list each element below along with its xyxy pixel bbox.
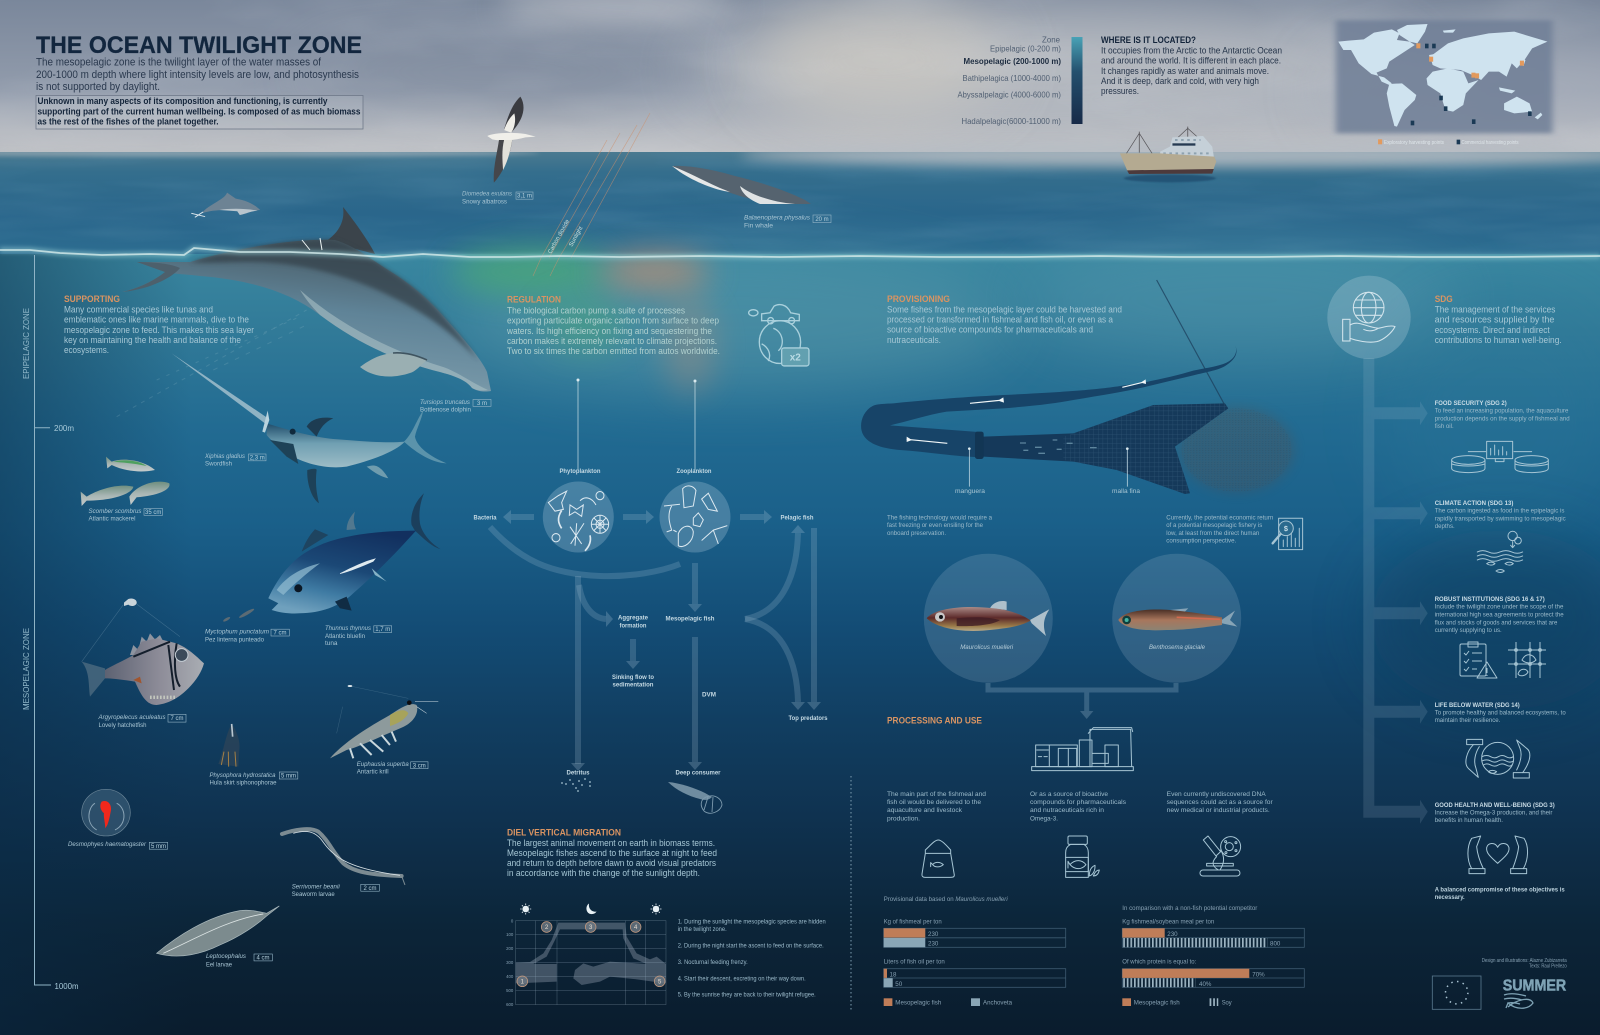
ocean zones scale: Zone [1042, 34, 1060, 44]
panel: supporting [64, 294, 254, 355]
diagram: carbon pump food web: DVM [702, 692, 716, 698]
phytoplankton circle [543, 482, 614, 552]
migration step notes: 5. By the sunrise they are back to their twilight refugee. [678, 992, 816, 999]
light rays with labels: carbon dioxide and sunlight [533, 113, 650, 276]
note: economic return: of a potential mesopelagic fishery is [1166, 522, 1262, 529]
chart: diel migration depth: 400 [506, 974, 514, 979]
chart: fishmeal and protein, mesopelagic vs soy: 230 [1167, 931, 1178, 938]
sdg: food security: production depends on the supply of fishmeal and [1435, 415, 1570, 422]
map legend: Exploratory harvesting points [1384, 140, 1444, 146]
icon: carbon into sea and fishes [1477, 531, 1523, 572]
label: snowy albatross: 3,1 m [517, 194, 532, 200]
label: atlantic mackerel: Atlantic mackerel [88, 516, 136, 523]
world map with harvesting points [1336, 20, 1553, 144]
label: myctophum: Myctophum punctatum [205, 629, 270, 636]
chart: fishmeal and protein, mesopelagic vs soy: Kg fishmeal/soybean meal per ton [1122, 918, 1215, 925]
icon: atlantic bluefin tuna [268, 493, 441, 613]
migration step notes: 2. During the night start the ascent to feed on the surface. [678, 943, 824, 950]
where is it located text: pressures. [1101, 85, 1139, 96]
sdg: climate action: The carbon ingested as food in the epipelagic is [1435, 508, 1564, 515]
panel: provisioning: nutraceuticals. [887, 335, 941, 345]
sdg: climate action: depths. [1435, 523, 1455, 530]
label: atlantic mackerel: Scomber scombrus [88, 508, 142, 515]
sdg: robust institutions [1435, 596, 1564, 634]
credits: Texts: Raul Prellezo [1529, 963, 1567, 969]
chart: fishmeal and fish oil, mesopelagic vs anchoveta: 230 [928, 931, 939, 938]
label: fin whale [744, 214, 831, 230]
closing statement: A balanced compromise of these objectives is [1435, 887, 1565, 894]
text: aquaculture use: The main part of the fishmeal and [887, 791, 986, 798]
migration step notes: in the twilight zone. [678, 926, 727, 933]
label: antarctic krill: 3 cm [413, 763, 426, 769]
chart: diel migration depth: 500 [506, 988, 514, 993]
label: siphonophore [210, 772, 298, 786]
panel: sdg intro: and resources supplied by the [1435, 315, 1555, 325]
chart: fishmeal and fish oil, mesopelagic vs anchoveta: 18 [890, 972, 897, 978]
net labels: manguera [955, 488, 985, 495]
label: bottlenose dolphin: Bottlenose dolphin [420, 406, 471, 414]
icon: leptocephalus eel larva [157, 906, 279, 956]
closing statement [1435, 887, 1565, 901]
text: bioactive compounds: compounds for pharmaceuticals [1030, 799, 1126, 806]
diagram: carbon pump food web: Aggregate [618, 615, 648, 622]
chart: fishmeal and protein, mesopelagic vs soy: 800 [1270, 940, 1281, 947]
panel: sdg intro [1435, 294, 1562, 345]
icon: hula skirt siphonophore [218, 723, 240, 767]
chart: fishmeal and fish oil, mesopelagic vs anchoveta: Provisional data based on Maurolicus muelleri [884, 896, 1008, 903]
text: dna sequences: Even currently undiscovered DNA [1167, 791, 1266, 798]
note: fishing technology: onboard preservation. [887, 530, 946, 537]
label: myctophum: Pez linterna punteado [205, 636, 264, 643]
label: lovely hatchetfish: 7 cm [170, 716, 184, 722]
diagram: carbon pump food web: Deep consumer [676, 770, 721, 776]
where is it located text: WHERE IS IT LOCATED? [1101, 34, 1196, 45]
icon: economic report magnifier: $ [1284, 524, 1288, 533]
key statement box: Unknown in many aspects of its composition and functioning, is currently [38, 96, 328, 106]
chart: fishmeal and protein, mesopelagic vs soy: Soy [1222, 1000, 1233, 1006]
depth axis: 200m [54, 423, 74, 433]
chart: diel migration depth [506, 904, 666, 1007]
panel: sdg intro: The management of the services [1435, 304, 1556, 314]
text: dna sequences: new medical or industrial products. [1167, 807, 1270, 814]
where is it located text: And it is deep, dark and cold, with very high [1101, 75, 1259, 86]
sdg: life below water: To promote healthy and balanced ecosystems, to [1435, 709, 1566, 716]
icon: globe held in hand [1327, 276, 1411, 359]
title block [36, 32, 362, 93]
sdg: food security: FOOD SECURITY (SDG 2) [1435, 400, 1507, 407]
diagram: carbon pump food web: Detritus [566, 770, 590, 776]
leader lines to plankton [577, 379, 696, 470]
icon: car on globe x2 [749, 305, 809, 366]
map legend: Commercial harvesting points [1462, 140, 1519, 146]
where is it located text: It changes rapidly as water and animals move. [1101, 65, 1269, 76]
panel: regulation: REGULATION [507, 294, 561, 304]
chart: fishmeal and protein, mesopelagic vs soy: Mesopelagic fish [1134, 1000, 1180, 1006]
icon: moon [586, 904, 596, 914]
icon: squid deep consumer [668, 782, 722, 813]
species circle: benthosema glaciale [1112, 554, 1241, 683]
panel: regulation: exporting particulate organic carbon from surface to deep [507, 316, 719, 326]
species circle: maurolicus muelleri [924, 554, 1053, 683]
sdg: climate action [1435, 500, 1566, 530]
label: swordfish [204, 453, 266, 468]
zooplankton circle [660, 482, 730, 552]
credits: Design and illustrations: Alazne Zubizarreta [1482, 958, 1567, 964]
chart: diel migration depth: 2 [545, 925, 549, 931]
label: swordfish: 2,3 m [250, 456, 265, 462]
ocean zones scale: Hadalpelagic(6000-11000 m) [962, 116, 1061, 126]
panel: regulation: carbon makes it extremely relevant to climate projections. [507, 336, 717, 346]
connector arrow to processing [988, 683, 1176, 719]
label: siphonophore: Hula skirt siphonophorae [210, 779, 277, 786]
icon: myctophum small fishes [223, 608, 255, 622]
icon: sun [650, 904, 662, 914]
chart: diel migration depth: 1 [521, 979, 525, 985]
net labels: malla fina [1112, 488, 1140, 495]
label: atlantic bluefin tuna: Atlantic bluefin [325, 633, 365, 640]
depth axis: 1000m [54, 981, 78, 991]
sdg: climate action: CLIMATE ACTION (SDG 13) [1435, 500, 1513, 507]
note: fishing technology [887, 515, 992, 537]
label: atlantic mackerel: 35 cm [145, 510, 161, 516]
chart: fishmeal and fish oil, mesopelagic vs anchoveta: Mesopelagic fish [895, 1000, 942, 1006]
plankton bloom colour plumes [450, 248, 716, 395]
label: atlantic bluefin tuna: Thunnus thynnus [325, 625, 372, 632]
icon: desmophyes jelly [82, 789, 130, 836]
icon: aquaculture ponds and monitor [1452, 441, 1548, 473]
icon: lovely hatchetfish [82, 598, 204, 705]
ocean zones scale: Abyssalpelagic (4000-6000 m) [958, 90, 1061, 100]
diagram: carbon pump food web: Zooplankton [676, 468, 712, 475]
text: aquaculture use: production. [887, 815, 920, 822]
icon: microscope [1200, 836, 1241, 876]
label: antarctic krill [357, 761, 428, 775]
depth axis: MESOPELAGIC ZONE [21, 628, 31, 710]
sdg: good health: GOOD HEALTH AND WELL-BEING (SDG 3) [1435, 802, 1555, 809]
icon: fish processing factory [1032, 728, 1133, 771]
map legend [1384, 140, 1519, 146]
label: antarctic krill: Antartic krill [357, 768, 389, 775]
key statement box: as the rest of the fishes of the planet together. [38, 116, 218, 126]
sdg: life below water [1435, 702, 1566, 724]
sdg: robust institutions: ROBUST INSTITUTIONS (SDG 16 & 17) [1435, 596, 1545, 603]
label: fin whale: Fin whale [744, 223, 773, 230]
label: fin whale: 20 m [815, 217, 829, 223]
sdg: climate action: rapidly transported by swimming to mesopelagic [1435, 515, 1566, 522]
icon: clipboard with warning [1460, 642, 1497, 678]
sdg: robust institutions: currently supplying to us. [1435, 627, 1502, 634]
diagram: carbon pump food web [474, 468, 828, 813]
panel: provisioning [887, 294, 1122, 345]
note: economic return [1166, 515, 1274, 544]
ocean zones scale: Epipelagic (0-200 m) [990, 44, 1061, 54]
label: snowy albatross [462, 190, 533, 206]
logo: european union flag [1432, 976, 1481, 1009]
label: siphonophore: Physophora hydrostatica [210, 772, 276, 779]
title block: is not supported by daylight. [36, 81, 160, 93]
key statement box [36, 96, 363, 129]
text: dna sequences: sequences could act as a source for [1167, 799, 1274, 806]
label: seaworm larvae: 2 cm [363, 886, 377, 892]
label: snowy albatross: Snowy albatross [462, 198, 507, 206]
icon: antarctic krill [330, 685, 438, 758]
panel: provisioning: source of bioactive compounds for pharmaceuticals and [887, 325, 1093, 335]
diagram: carbon pump food web: Bacteria [474, 514, 497, 522]
panel: provisioning: processed or transformed in fishmeal and fish oil, or even as a [887, 314, 1113, 324]
chart: diel migration depth: 100 [506, 932, 514, 937]
label: bottlenose dolphin: 3 m [477, 401, 487, 407]
sdg: life below water: maintain their resilience. [1435, 717, 1501, 724]
label: myctophum: 7 cm [273, 631, 287, 637]
migration step notes: 3. Nocturnal feeding frenzy. [678, 959, 748, 966]
chart: fishmeal and fish oil, mesopelagic vs anchoveta: 230 [928, 940, 939, 947]
sdg: robust institutions: international high sea agreements to protect the [1435, 612, 1564, 619]
light rays with labels: carbon dioxide and sunlight: Carbon dioxide [548, 218, 571, 255]
light rays with labels: carbon dioxide and sunlight: Sunlight [569, 226, 585, 248]
icon: seaworm larvae eel [282, 829, 405, 885]
chart: fishmeal and protein, mesopelagic vs soy: In comparison with a non-fish potential competitor [1122, 905, 1257, 912]
chart: diel migration depth: 200 [506, 946, 514, 951]
label: atlantic bluefin tuna [325, 625, 392, 647]
label: atlantic mackerel [88, 508, 162, 523]
panel: diel vertical migration: DIEL VERTICAL MIGRATION [507, 827, 621, 837]
logo: summer project: SUMMER [1503, 978, 1567, 995]
panel: supporting: SUPPORTING [64, 294, 120, 304]
chart: fishmeal and fish oil, mesopelagic vs anchoveta [884, 896, 1066, 1006]
where is it located text [1101, 34, 1282, 96]
migration step notes [678, 919, 826, 999]
icon: atlantic mackerel [81, 457, 170, 506]
title block: THE OCEAN TWILIGHT ZONE [36, 32, 362, 59]
panel: supporting: ecosystems. [64, 345, 109, 355]
label: swordfish: Swordfish [205, 460, 232, 468]
label: eel larvae: Eel larvae [206, 961, 232, 968]
diagram: carbon pump food web: formation [620, 622, 647, 629]
label: seaworm larvae [292, 884, 379, 898]
label: swordfish: Xiphias gladius [204, 453, 246, 460]
label: antarctic krill: Euphausia superba [357, 761, 409, 768]
sdg: robust institutions: flux and stocks of goods and services that are [1435, 619, 1558, 626]
title block: 200-1000 m depth where light intensity levels are low, and photosynthesis [36, 69, 360, 81]
chart: diel migration depth: 3 [589, 925, 593, 931]
panel: supporting: Many commercial species like tunas and [64, 304, 213, 314]
net labels [955, 488, 1140, 495]
flow arrows [490, 510, 821, 771]
icon: hands protecting heart [1468, 836, 1528, 874]
sdg: life below water: LIFE BELOW WATER (SDG 14) [1435, 702, 1520, 709]
sdg: food security: To feed an increasing population, the aquaculture [1435, 408, 1569, 415]
label: lovely hatchetfish: Argyropelecus aculeatus [98, 714, 166, 721]
illustration: trawl net and hose [861, 280, 1295, 494]
panel: supporting: emblematic ones like marine mammals, dive to the [64, 314, 249, 324]
diagram: carbon pump food web: Sinking flow to [612, 674, 654, 681]
label: siphonophore: 5 mm [281, 774, 296, 780]
closing statement: necessary. [1435, 894, 1465, 901]
sdg spine with branch arrows [1363, 358, 1428, 824]
diagram: carbon pump food web: Mesopelagic fish [666, 616, 715, 623]
icon: sun [520, 904, 531, 914]
text: dna sequences [1167, 791, 1274, 814]
icon: detritus particles [561, 778, 591, 792]
text: bioactive compounds: Omega-3. [1030, 815, 1058, 822]
icon: economic report magnifier [1273, 518, 1303, 550]
label: desmophyes: Desmophyes haematogaster [68, 841, 147, 848]
species caption: maurolicus muelleri: Maurolicus muelleri [960, 644, 1014, 651]
ocean zones scale [958, 34, 1082, 126]
icon: hands protecting the sea [1466, 739, 1530, 778]
panel: sdg intro: SDG [1435, 294, 1453, 304]
label: desmophyes: 5 mm [151, 844, 166, 850]
chart: fishmeal and protein, mesopelagic vs soy: Of which protein is equal to: [1122, 958, 1197, 965]
note: economic return: Currently, the potential economic return [1166, 515, 1274, 522]
sdg: good health: Increase the Omega-3 production, and their [1435, 809, 1553, 816]
icon: fishing research ship [1120, 127, 1216, 182]
text: bioactive compounds: and nutraceuticals rich in [1030, 807, 1104, 814]
chart: diel migration depth: 0 [511, 918, 514, 923]
migration step notes: 1. During the sunlight the mesopelagic species are hidden [678, 919, 826, 926]
panel: sdg intro: ecosystems. Direct and indirect [1435, 325, 1550, 335]
note: fishing technology: fast freezing or even ensiling for the [887, 522, 983, 529]
ocean zones scale: Mesopelagic (200-1000 m) [964, 56, 1061, 66]
note: economic return: low, at least from the direct human [1166, 530, 1260, 537]
label: lovely hatchetfish [98, 714, 186, 729]
heading: processing and use: PROCESSING AND USE [887, 716, 982, 726]
panel: regulation [506, 294, 720, 356]
panel: diel vertical migration: and return to depth before dawn to avoid visual predators [507, 858, 717, 868]
chart: diel migration depth: 300 [506, 960, 514, 965]
diagram: carbon pump food web: Phytoplankton [560, 468, 601, 475]
dotted section divider [850, 776, 852, 1011]
icon: omega-3 supplement bottle [1066, 836, 1099, 877]
panel: provisioning: Some fishes from the mesopelagic layer could be harvested and [887, 304, 1122, 314]
panel: supporting: mesopelagic zone to feed. This makes this sea layer [64, 325, 254, 335]
depth axis: EPIPELAGIC ZONE [21, 308, 31, 379]
note: economic return: consumption perspective. [1166, 537, 1237, 544]
label: seaworm larvae: Serrivomer beanii [292, 884, 340, 891]
chart: fishmeal and fish oil, mesopelagic vs anchoveta: Liters of fish oil per ton [884, 958, 945, 965]
sdg: robust institutions: Include the twilight zone under the scope of the [1435, 604, 1564, 611]
note: fishing technology: The fishing technology would require a [887, 515, 992, 522]
chart: fishmeal and fish oil, mesopelagic vs anchoveta: Anchoveta [983, 1000, 1013, 1006]
label: fin whale: Balaenoptera physalus [744, 214, 811, 222]
label: snowy albatross: Diomedea exulans [462, 190, 513, 198]
icon: bottlenose dolphin [122, 207, 491, 392]
label: atlantic bluefin tuna: tuna [325, 640, 338, 647]
icon: fin whale [672, 166, 811, 204]
panel: diel vertical migration: The largest animal movement on earth in biomass terms. [507, 838, 715, 848]
where is it located text: and around the world. It is different in each place. [1101, 55, 1281, 66]
label: atlantic bluefin tuna: 1,7 m [375, 627, 390, 633]
panel: supporting: key on maintaining the health and balance of the [64, 335, 241, 345]
migration step notes: 4. Start their descent, excreting on their way down. [678, 975, 806, 982]
chart: fishmeal and protein, mesopelagic vs soy: 70% [1252, 972, 1265, 978]
text: bioactive compounds [1030, 791, 1126, 822]
label: desmophyes [68, 841, 168, 850]
logo: summer project [1503, 978, 1567, 1008]
panel: regulation: Two to six times the carbon emitted from autos worldwide. [507, 346, 720, 356]
sdg: good health: benefits in human health. [1435, 817, 1503, 824]
label: eel larvae: Leptocephalus [206, 953, 247, 960]
panel: diel vertical migration [507, 827, 717, 878]
label: bottlenose dolphin: Tursiops truncatus [420, 399, 471, 406]
depth axis [21, 255, 78, 991]
diagram: carbon pump food web: Top predators [788, 715, 828, 722]
chart: fishmeal and fish oil, mesopelagic vs anchoveta: Kg of fishmeal per ton [884, 918, 942, 925]
icon: small dolphin leaping [191, 193, 260, 217]
icon: snowy albatross [487, 97, 536, 183]
panel: sdg intro: contributions to human well-being. [1435, 335, 1562, 345]
diagram: carbon pump food web: sedimentation [612, 682, 654, 688]
text: aquaculture use [887, 791, 986, 822]
title block: The mesopelagic zone is the twilight layer of the water masses of [36, 56, 322, 68]
icon: swordfish [172, 353, 447, 503]
icon: fishmeal bag [922, 840, 954, 877]
panel: regulation: waters. Its high efficiency on fixing and sequestering the [506, 326, 712, 336]
icon: car on globe x2: x2 [790, 353, 801, 364]
ocean zones scale: Bathipelagica (1000-4000 m) [962, 73, 1061, 83]
text: aquaculture use: fish oil would be delivered to the [887, 799, 981, 806]
sea surface waterline [0, 238, 1600, 257]
text: bioactive compounds: Or as a source of bioactive [1030, 791, 1108, 798]
label: eel larvae [206, 953, 272, 968]
label: bottlenose dolphin [420, 399, 491, 414]
panel: diel vertical migration: Mesopelagic fishes ascend to the surface at night to feed [507, 848, 717, 858]
icon: ocean governance grid [1508, 642, 1546, 678]
panel: diel vertical migration: in accordance with the change of the sunlight depth. [507, 868, 700, 878]
sdg: food security: fish oil. [1435, 423, 1454, 430]
label: lovely hatchetfish: Lovely hatchetfish [98, 722, 147, 729]
diagram: carbon pump food web: Pelagic fish [780, 514, 814, 522]
sdg: good health [1435, 802, 1555, 824]
panel: regulation: The biological carbon pump a suite of processes [507, 305, 686, 315]
chart: fishmeal and protein, mesopelagic vs soy [1122, 905, 1304, 1006]
species caption: benthosema glaciale: Benthosema glaciale [1149, 644, 1205, 651]
panel: provisioning: PROVISIONING [887, 294, 950, 304]
chart: fishmeal and fish oil, mesopelagic vs anchoveta: 50 [895, 981, 903, 988]
label: myctophum [205, 629, 289, 643]
label: eel larvae: 4 cm [256, 956, 270, 962]
text: aquaculture use: aquaculture and livestock [887, 807, 963, 814]
small fish school [117, 310, 310, 417]
credits [1482, 958, 1567, 969]
chart: diel migration depth: 4 [634, 925, 638, 931]
chart: diel migration depth: 600 [506, 1002, 514, 1007]
sdg: food security [1435, 400, 1570, 430]
chart: fishmeal and protein, mesopelagic vs soy: 40% [1199, 981, 1212, 988]
label: seaworm larvae: Seaworm larvae [292, 891, 335, 898]
where is it located text: It occupies from the Arctic to the Antarctic Ocean [1101, 44, 1282, 56]
chart: diel migration depth: 5 [658, 979, 662, 985]
key statement box: supporting part of the current human wellbeing. Is composed of as much biomass [38, 106, 360, 116]
